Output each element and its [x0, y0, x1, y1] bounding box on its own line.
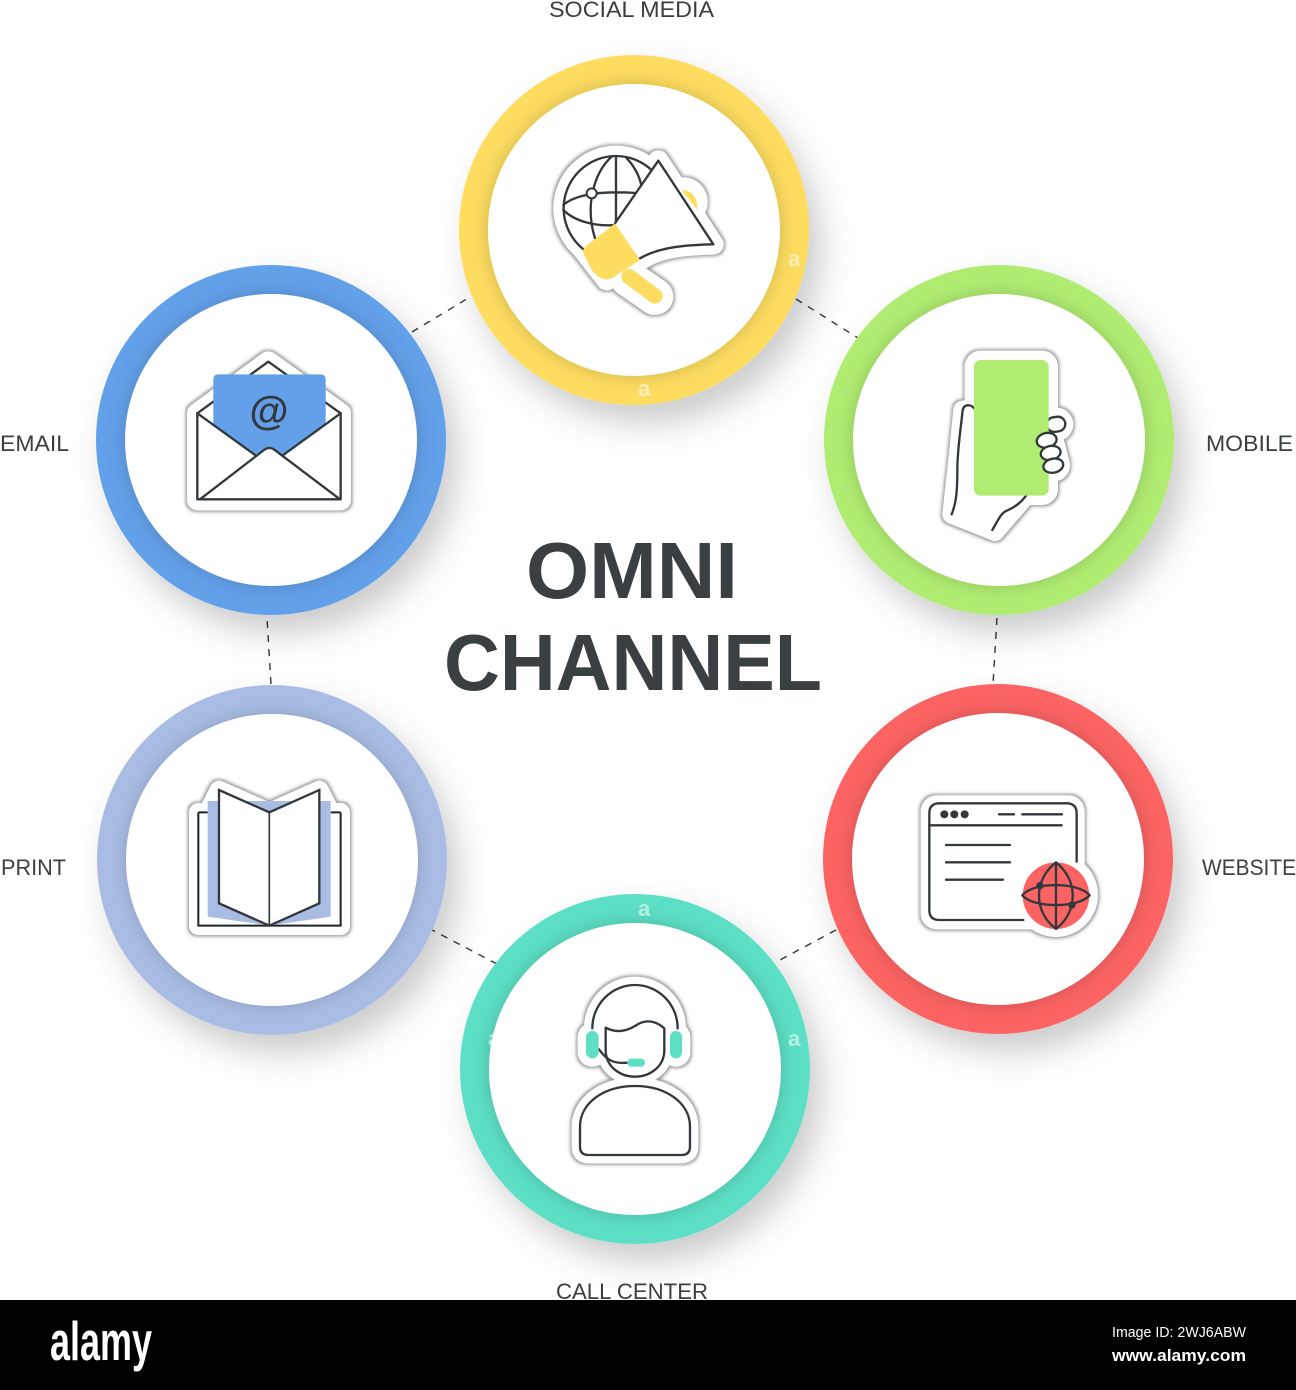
- connector: call center to print: [432, 930, 497, 964]
- text: a: [488, 1026, 501, 1051]
- footer image id: Image ID: 2WJ6ABW: [1112, 1324, 1247, 1341]
- label: email: EMAIL: [0, 431, 69, 456]
- footer band: [0, 1300, 1296, 1390]
- icon: call center agent: [580, 985, 690, 1155]
- ring: mobile: [824, 265, 1174, 615]
- ring: call center: [460, 894, 810, 1244]
- ring: website: [823, 684, 1173, 1034]
- text: a: [788, 246, 801, 271]
- text: a: [788, 1026, 801, 1051]
- title: CHANNEL: [444, 618, 822, 707]
- icon: open book: [198, 790, 341, 926]
- connector: email to social media: [412, 297, 470, 332]
- label: print: PRINT: [1, 855, 66, 880]
- title: [444, 526, 822, 707]
- title: OMNI: [526, 526, 738, 615]
- connector: social media to mobile: [796, 299, 858, 338]
- ring: print: [97, 685, 447, 1035]
- label: call center: CALL CENTER: [556, 1279, 708, 1304]
- ring: email: [96, 265, 446, 615]
- icon: open envelope with at sign: [197, 362, 341, 500]
- connector: print to email: [267, 618, 271, 684]
- footer website: www.alamy.com: [1111, 1346, 1246, 1365]
- footer logo: alamy: [50, 1310, 152, 1372]
- icon: hand holding mobile: [952, 360, 1066, 532]
- connector: website to call center: [778, 930, 836, 961]
- icon: globe and megaphone: [563, 156, 713, 297]
- ring: social media: [459, 55, 809, 405]
- text: a: [638, 376, 651, 401]
- label: mobile: MOBILE: [1206, 431, 1293, 456]
- text: a: [638, 896, 651, 921]
- icon: browser window with globe: [921, 795, 1098, 937]
- icon: open envelope with at sign: @: [249, 389, 288, 433]
- connector: mobile to website: [993, 618, 997, 684]
